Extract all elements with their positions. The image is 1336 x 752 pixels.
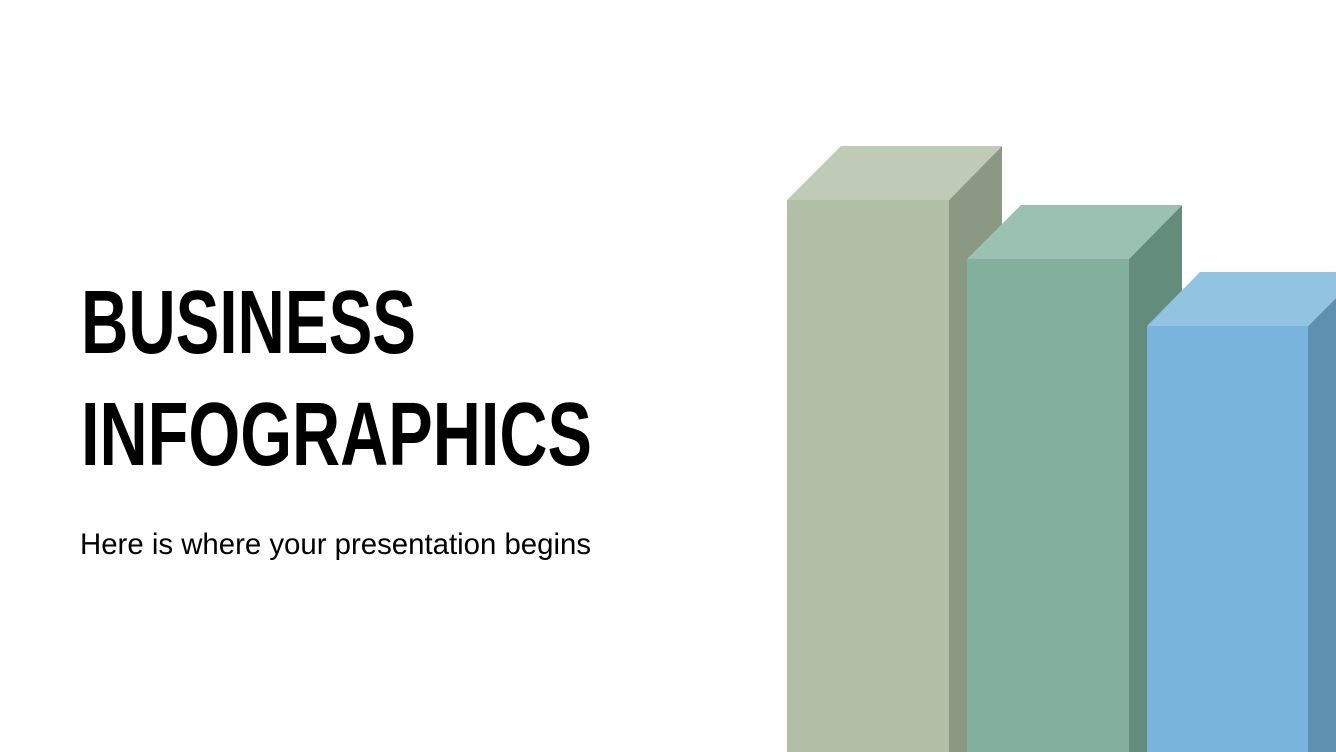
- 3D bar chart: [787, 146, 1336, 752]
- subtitle: Here is where your presentation begins: [80, 528, 591, 561]
- title: BUSINESS: [81, 273, 416, 373]
- title: [81, 273, 592, 485]
- bar: sage green: [787, 146, 1002, 752]
- title: INFOGRAPHICS: [81, 385, 592, 485]
- bar: blue: [1147, 272, 1336, 752]
- bar: teal green: [967, 205, 1182, 752]
